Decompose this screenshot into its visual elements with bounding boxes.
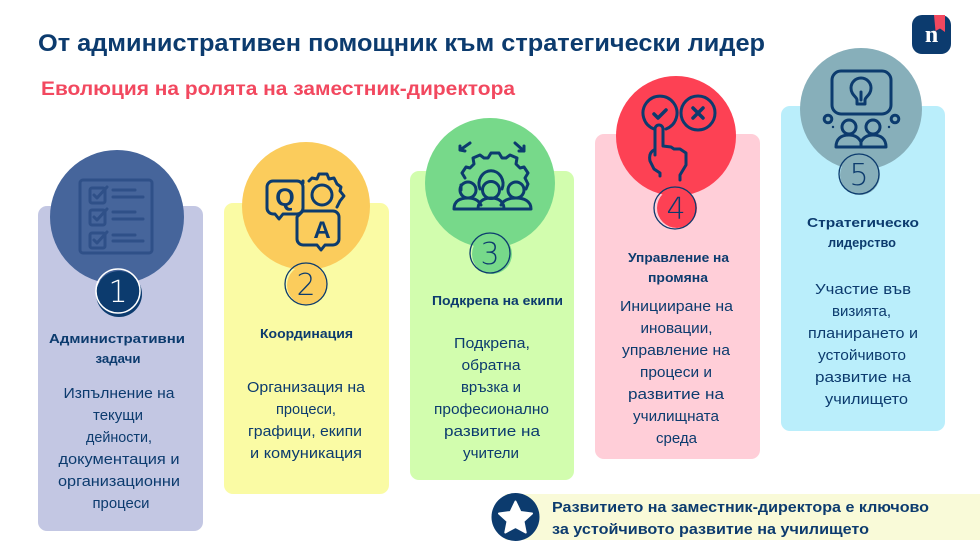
text: step 2 — [247, 379, 366, 462]
heading: step 4: Управление на — [628, 250, 730, 265]
icon: team with gear — [454, 143, 531, 209]
badge: number 1: 1 — [108, 275, 128, 310]
panel: step 1 — [38, 150, 203, 531]
icon: questions and answers — [267, 174, 344, 250]
icon: questions and answers: A — [313, 217, 331, 244]
badge: number 5 — [839, 154, 880, 195]
callout text — [552, 500, 929, 538]
heading: step 5 — [807, 215, 919, 250]
heading: step 3: Подкрепа на екипи — [432, 293, 563, 308]
text: step 1 — [58, 385, 180, 512]
icon: logo: n — [925, 22, 938, 48]
text: step 5: устойчивото — [818, 347, 906, 364]
text: step 3 — [434, 335, 549, 462]
callout text: за устойчивото развитие на училището — [552, 522, 869, 538]
heading: step 4: промяна — [648, 270, 709, 285]
text: step 1: дейности, — [86, 429, 152, 446]
text: step 4: среда — [656, 430, 698, 447]
text: step 4: управление на — [622, 342, 731, 359]
icon: logo — [912, 15, 951, 54]
text: step 2: Организация на — [247, 379, 366, 396]
heading: step 5: лидерство — [828, 235, 896, 250]
text: step 4: иновации, — [640, 320, 712, 337]
text: step 1: организационни — [58, 473, 180, 490]
text: step 4: Иницииране на — [620, 298, 734, 315]
panel: step 3 — [410, 118, 574, 480]
badge: number 4 — [654, 187, 697, 229]
text: step 5: планирането и — [808, 325, 918, 342]
icon: idea presentation — [824, 71, 899, 147]
text: step 3: връзка и — [461, 379, 521, 396]
heading: step 1: задачи — [96, 351, 141, 366]
heading: step 2: Координация — [260, 326, 353, 341]
text: step 5 — [808, 281, 918, 408]
text: step 5: училището — [825, 391, 908, 408]
text: step 3: професионално — [434, 401, 549, 418]
badge: number 3: 3 — [480, 237, 500, 272]
heading: step 5: Стратегическо — [807, 215, 919, 230]
icon: checklist — [80, 180, 152, 253]
callout text: Развитието на заместник-директора е ключово — [552, 500, 929, 516]
text: step 3: развитие на — [444, 423, 541, 440]
text: step 1: Изпълнение на — [64, 385, 175, 402]
icon: questions and answers: Q — [275, 184, 295, 212]
badge: number 2 — [285, 263, 327, 305]
title: От административен помощник към стратегически лидер — [38, 30, 765, 57]
panel: step 2 — [224, 142, 389, 494]
badge: number 1 — [96, 269, 142, 317]
text: step 1: документация и — [58, 451, 180, 468]
text: step 5: Участие във — [815, 281, 911, 298]
badge: number 4: 4 — [666, 192, 686, 227]
text: step 2: графици, екипи — [248, 423, 362, 440]
text: step 3: обратна — [462, 357, 521, 374]
text: step 1: текущи — [93, 407, 143, 424]
heading: step 1: Административни — [49, 331, 185, 346]
icon: star — [492, 493, 540, 541]
callout: key message — [492, 493, 980, 541]
text: step 2: процеси, — [276, 401, 336, 418]
text: step 4: процеси и — [640, 364, 712, 381]
text: step 5: визията, — [832, 303, 891, 320]
subtitle: Еволюция на ролята на заместник-директора — [41, 79, 515, 100]
text: step 3: Подкрепа, — [454, 335, 530, 352]
panel: step 5 — [781, 48, 945, 431]
text: step 2: и комуникация — [250, 445, 362, 462]
badge: number 2: 2 — [296, 268, 316, 303]
text: step 1: процеси — [92, 495, 150, 512]
heading: step 1 — [49, 331, 185, 366]
text: step 4 — [620, 298, 734, 447]
text: step 4: развитие на — [628, 386, 725, 403]
text: step 4: училищната — [633, 408, 720, 425]
badge: number 5: 5 — [849, 158, 869, 193]
heading: step 4 — [628, 250, 730, 285]
badge: number 3 — [470, 233, 512, 274]
text: step 5: развитие на — [815, 369, 912, 386]
text: step 3: учители — [463, 445, 519, 462]
panel: step 4 — [595, 76, 760, 459]
icon: hand choosing check or cross — [643, 96, 715, 180]
